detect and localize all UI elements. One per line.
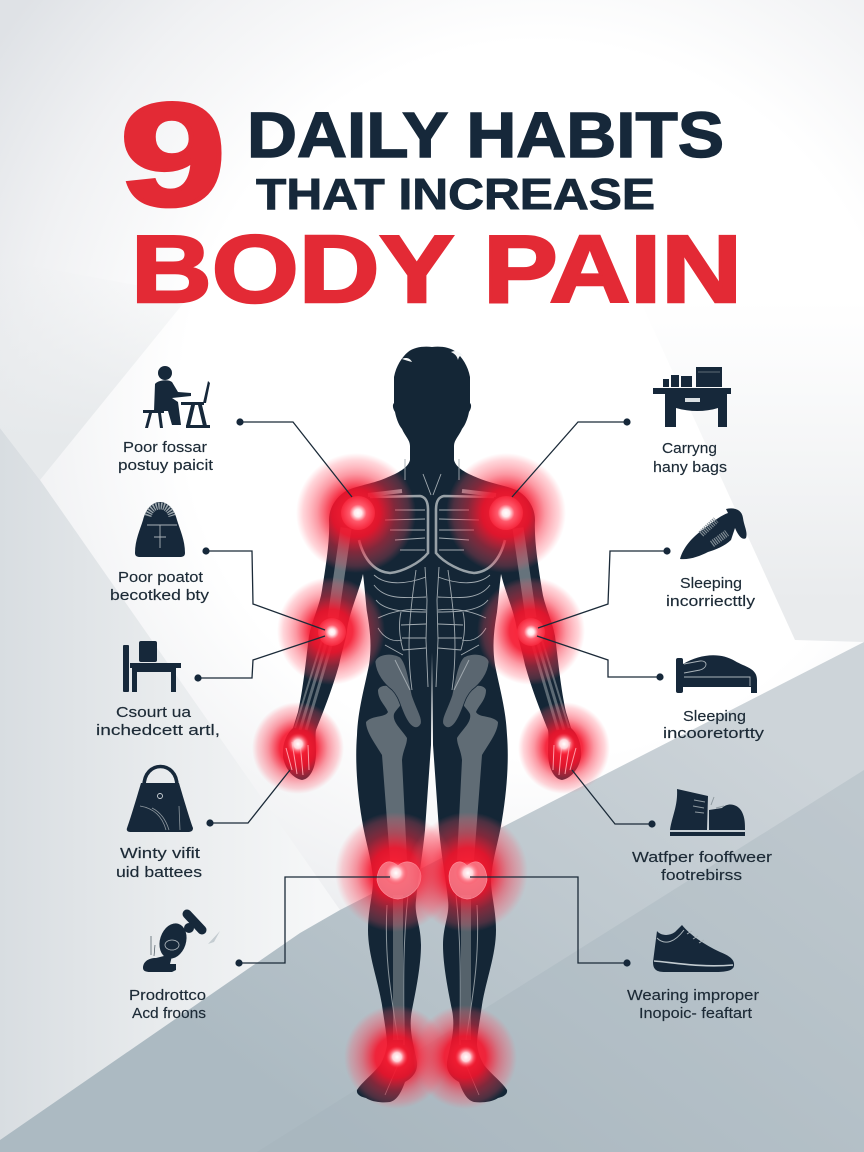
shin bones bbox=[386, 895, 408, 1045]
label: habit 5 bbox=[129, 987, 206, 1022]
label: right habit 1 bbox=[653, 440, 727, 476]
label: right habit 2: incorriecttly bbox=[666, 593, 756, 610]
glow: left knee bbox=[335, 812, 455, 932]
left column habit 3 bbox=[96, 641, 220, 739]
left column habit 5 bbox=[129, 914, 220, 1022]
label: habit 4 bbox=[116, 845, 202, 881]
label: right habit 3: Sleeping bbox=[683, 708, 746, 725]
label: right habit 4: footrebirss bbox=[661, 867, 742, 884]
connector: right 1 bbox=[512, 418, 631, 497]
connector: right 4 bbox=[572, 770, 656, 828]
connector: left 3 bbox=[194, 636, 325, 682]
icon: handbag bbox=[127, 766, 193, 832]
right column habit 3 bbox=[663, 655, 765, 742]
icon: sneaker bbox=[653, 925, 734, 972]
icon: joint and pad bbox=[143, 914, 220, 972]
title line: daily habits: DAILY HABITS bbox=[247, 99, 724, 171]
label: right habit 1: Carryng bbox=[662, 440, 717, 457]
label: habit 1: Poor fossar bbox=[123, 439, 207, 456]
glow: right elbow bbox=[477, 577, 585, 685]
label: habit 5: Prodrottco bbox=[129, 987, 206, 1004]
pelvis and femur bbox=[366, 654, 421, 860]
connector: right 5 bbox=[470, 877, 631, 967]
label: habit 2: becotked bty bbox=[110, 587, 210, 604]
glow: right shoulder bbox=[446, 453, 566, 573]
label: right habit 2: Sleeping bbox=[680, 575, 742, 592]
glow: left shoulder bbox=[296, 453, 416, 573]
left column habit 4 bbox=[116, 766, 202, 881]
label: habit 5: Acd froons bbox=[132, 1005, 206, 1022]
glow: right ankle bbox=[413, 1005, 517, 1109]
label: right habit 2 bbox=[666, 575, 756, 610]
glow: right knee bbox=[408, 812, 528, 932]
label: right habit 5: Wearing improper bbox=[627, 987, 759, 1004]
human body figure bbox=[283, 347, 581, 1102]
connector: right 3 bbox=[537, 636, 664, 681]
connector: left 1 bbox=[236, 418, 352, 497]
right column habit 1 bbox=[653, 367, 731, 476]
title bbox=[120, 73, 742, 323]
icon: table with bags bbox=[653, 367, 731, 427]
label: right habit 5 bbox=[627, 987, 759, 1022]
glow: left elbow bbox=[277, 577, 385, 685]
connector: left 4 bbox=[206, 770, 290, 827]
icon: sleeping pad bbox=[680, 508, 747, 559]
anatomy mirrored bbox=[433, 459, 569, 1095]
label: right habit 3 bbox=[663, 708, 765, 742]
anatomy: bones, pelvis and muscle lines bbox=[295, 459, 431, 1095]
label: habit 3 bbox=[96, 704, 220, 739]
connector lines bbox=[194, 418, 671, 967]
label: habit 3: Csourt ua bbox=[116, 704, 192, 721]
label: habit 3: inchedcett artl, bbox=[96, 722, 220, 739]
connector: right 2 bbox=[538, 547, 671, 628]
right column habit 5 bbox=[627, 925, 759, 1022]
icon: bed bbox=[676, 655, 757, 693]
connector: left 2 bbox=[202, 547, 325, 630]
label: right habit 4 bbox=[632, 849, 772, 884]
foot line bbox=[385, 1060, 400, 1095]
icon: boots bbox=[670, 789, 745, 836]
icon: person at desk bbox=[143, 366, 210, 428]
title numeral 9: 9 bbox=[120, 73, 226, 236]
glow: left ankle bbox=[344, 1005, 448, 1109]
label: habit 1 bbox=[118, 439, 214, 474]
title line: body pain: BODY PAIN bbox=[131, 216, 742, 323]
label: right habit 3: incooretortty bbox=[663, 725, 765, 742]
connector: left 5 bbox=[235, 877, 390, 967]
label: right habit 4: Watfper fooffweer bbox=[632, 849, 772, 866]
label: habit 2 bbox=[110, 569, 210, 604]
chest and abdominal lines bbox=[359, 459, 431, 690]
label: habit 4: uid battees bbox=[116, 864, 202, 881]
right column habit 4 bbox=[632, 789, 772, 884]
label: habit 2: Poor poatot bbox=[118, 569, 204, 586]
icon: desk with box bbox=[123, 641, 181, 692]
label: habit 4: Winty vifit bbox=[120, 845, 201, 862]
title line: that increase: THAT INCREASE bbox=[256, 170, 655, 219]
left column habit 1 bbox=[118, 366, 214, 474]
label: right habit 1: hany bags bbox=[653, 459, 727, 476]
glow: left wrist bbox=[252, 702, 344, 794]
right column habit 2 bbox=[666, 508, 756, 610]
hair notches bbox=[402, 351, 464, 362]
label: habit 1: postuy paicit bbox=[118, 457, 214, 474]
arm bones bbox=[295, 528, 346, 730]
label: right habit 5: Inopoic- feaftart bbox=[639, 1005, 753, 1022]
pain glow spots bbox=[252, 453, 610, 1109]
left column habit 2 bbox=[110, 502, 210, 604]
glow: right wrist bbox=[518, 702, 610, 794]
body silhouette bbox=[283, 347, 581, 1102]
icon: backpack bbox=[135, 502, 185, 557]
